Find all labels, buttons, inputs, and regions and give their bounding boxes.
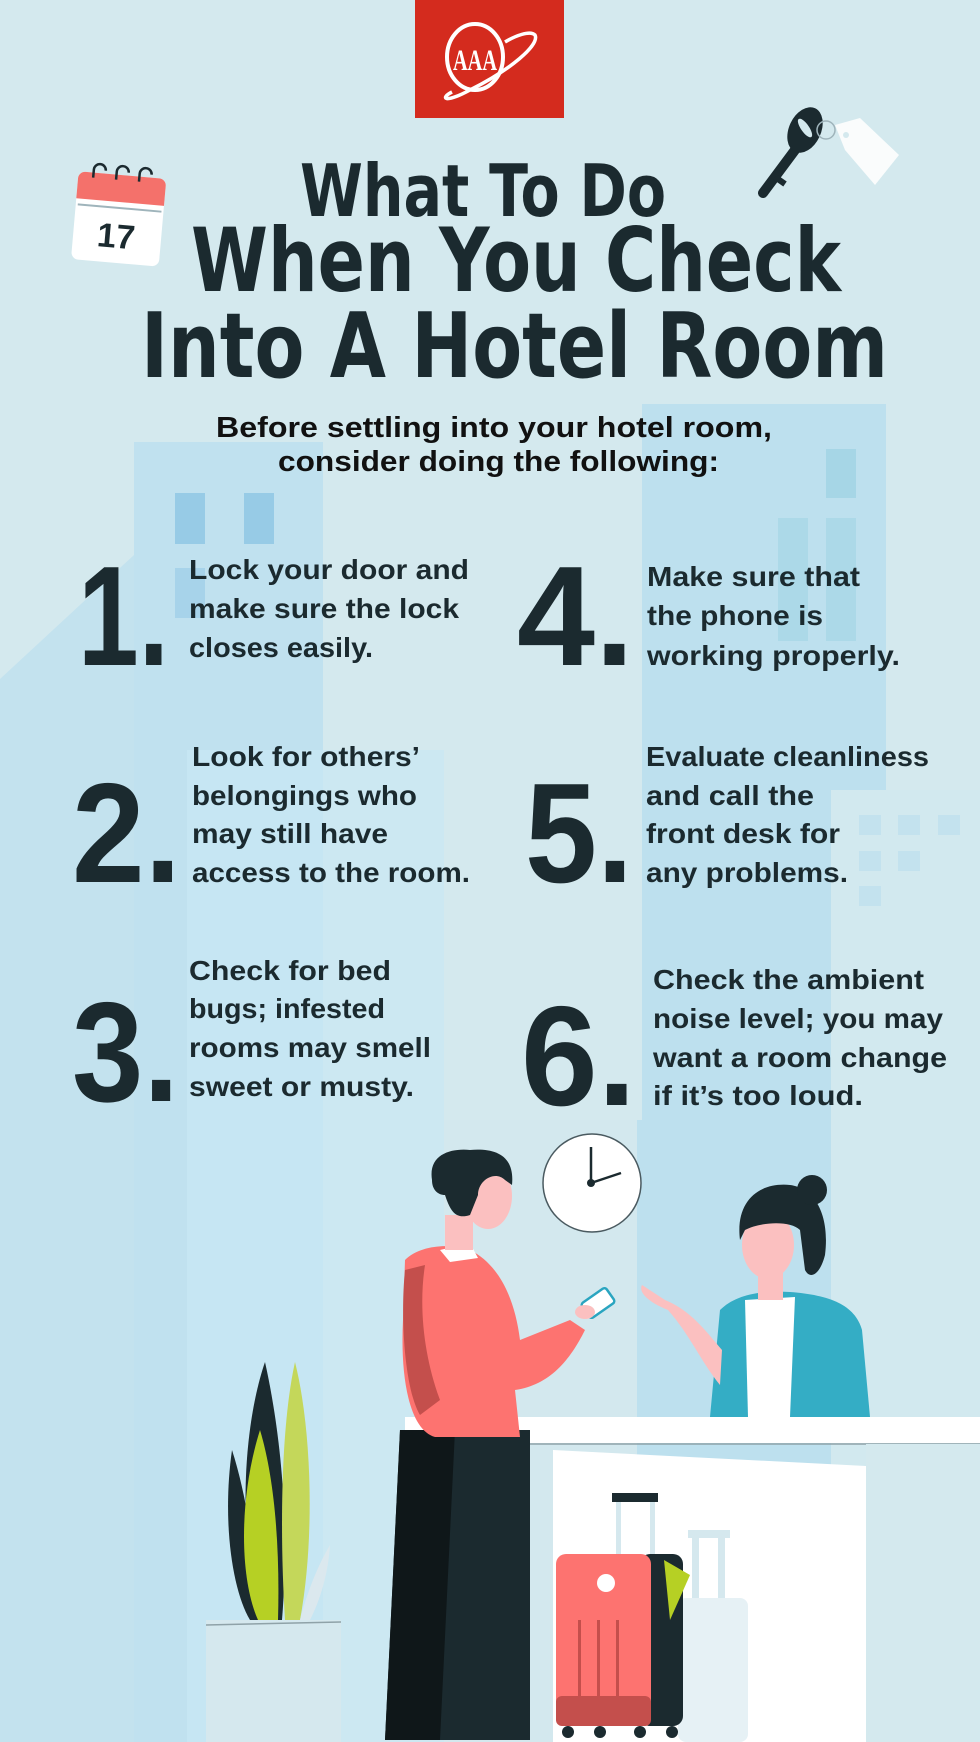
- item 1: make sure the lock: [189, 593, 459, 624]
- item 1: Lock your door and: [189, 554, 469, 585]
- woman receptionist: [641, 1175, 870, 1417]
- item 2: may still have: [192, 818, 388, 849]
- item 3: Check for bed: [189, 955, 391, 986]
- subtitle: [216, 412, 772, 478]
- item 4: working properly.: [646, 640, 900, 671]
- item 2: belongings who: [192, 780, 417, 811]
- item 1: [78, 537, 469, 696]
- item 1: closes easily.: [189, 632, 373, 663]
- item 6: if it’s too loud.: [653, 1080, 863, 1111]
- item 6: noise level; you may: [653, 1003, 943, 1034]
- ghost suitcase: [678, 1530, 748, 1742]
- item 5: and call the: [646, 780, 814, 811]
- illustration background columns: [444, 1120, 831, 1742]
- item 5: any problems.: [646, 857, 848, 888]
- item 5: 5.: [525, 754, 633, 913]
- item 5: Evaluate cleanliness: [646, 741, 929, 772]
- suitcase: [556, 1493, 690, 1738]
- item 6: want a room change: [652, 1042, 947, 1073]
- subtitle: consider doing the following:: [278, 446, 719, 478]
- icon: key: [763, 101, 899, 193]
- desk: [405, 1417, 980, 1742]
- plant: [206, 1362, 341, 1742]
- subtitle: Before settling into your hotel room,: [216, 412, 772, 444]
- item 3: [72, 955, 431, 1132]
- man guest: [385, 1150, 615, 1740]
- item 4: the phone is: [647, 600, 823, 631]
- item 2: [72, 741, 470, 913]
- item 2: access to the room.: [192, 857, 470, 888]
- item 2: Look for others’: [192, 741, 420, 772]
- icon: calendar: 17: [96, 216, 137, 257]
- item 5: front desk for: [646, 818, 840, 849]
- title: What To Do: [300, 149, 666, 233]
- icon: clock: [543, 1134, 641, 1232]
- item 1: 1.: [78, 537, 169, 696]
- title: [141, 149, 888, 399]
- item 5: [525, 741, 929, 913]
- icon: calendar: [71, 162, 167, 267]
- item 4: [517, 537, 900, 696]
- item 4: Make sure that: [647, 561, 860, 592]
- item 2: 2.: [72, 754, 181, 913]
- AAA logo: AAA: [453, 44, 497, 77]
- item 4: 4.: [517, 537, 634, 696]
- item 3: 3.: [72, 973, 179, 1132]
- item 3: rooms may smell: [189, 1032, 431, 1063]
- item 3: bugs; infested: [189, 993, 385, 1024]
- item 6: Check the ambient: [653, 964, 924, 995]
- item 3: sweet or musty.: [189, 1071, 414, 1102]
- item 6: [521, 964, 947, 1136]
- AAA logo: [415, 0, 564, 118]
- item 6: 6.: [521, 977, 636, 1136]
